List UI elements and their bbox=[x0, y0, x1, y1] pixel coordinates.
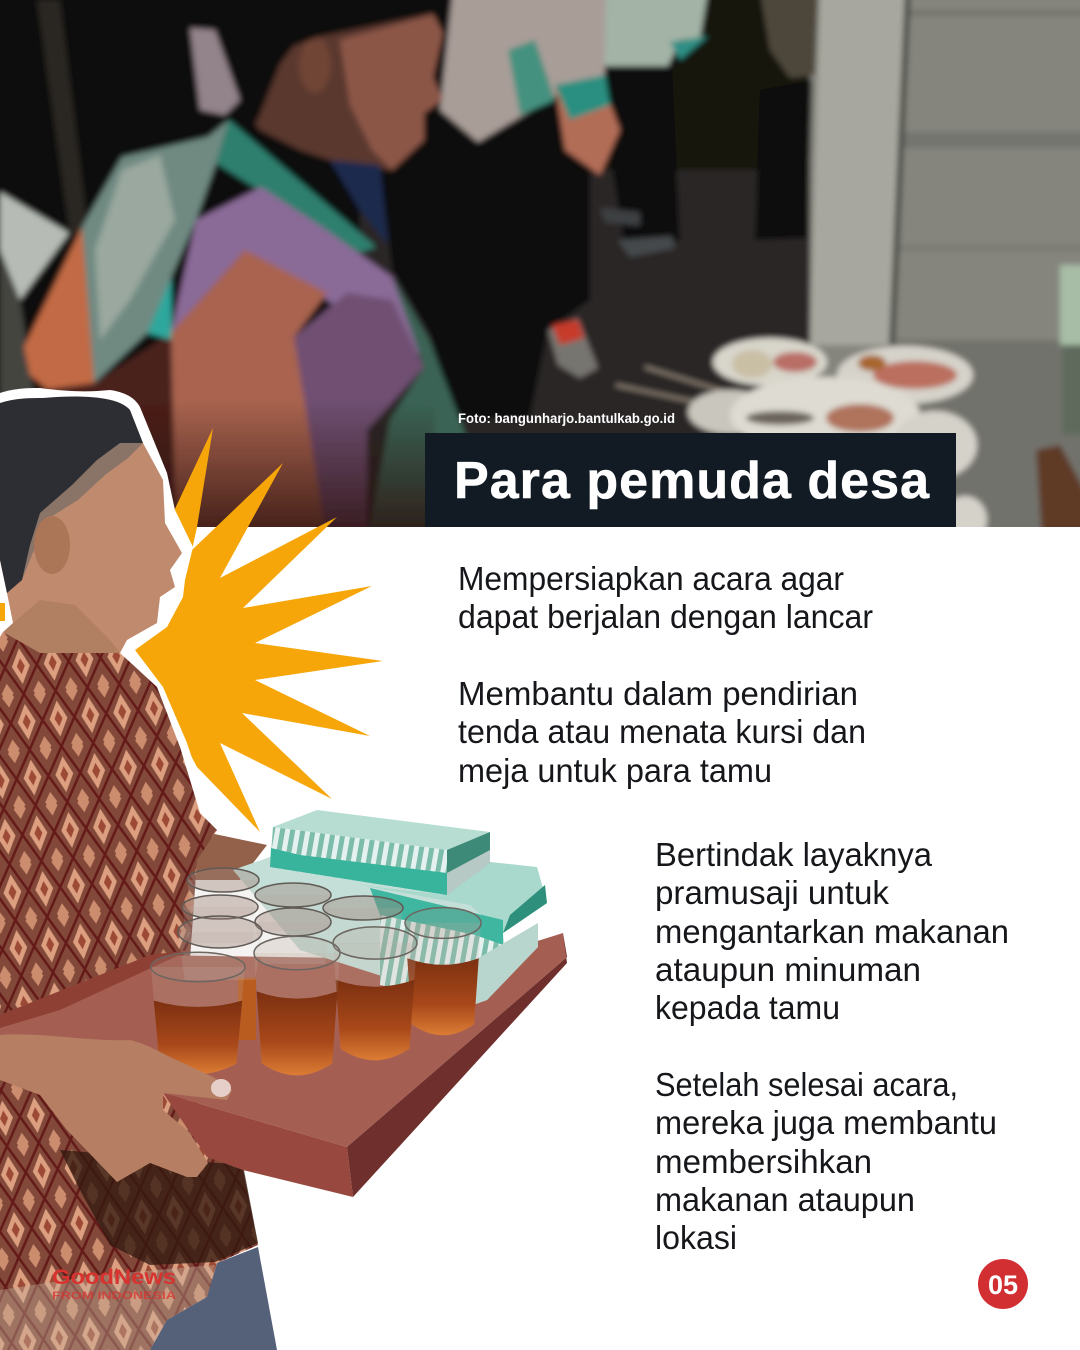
tray with glasses and boxes bbox=[0, 810, 567, 1197]
text block: setting up tents: tenda atau menata kursi dan bbox=[458, 713, 866, 750]
ear bbox=[34, 516, 70, 574]
photo credit: Foto: bangunharjo.bantulkab.go.id bbox=[458, 411, 675, 426]
tea behind front glasses bbox=[238, 978, 256, 1040]
hair fade bbox=[22, 440, 143, 580]
logo: GoodNews From Indonesia: FROM INDONESIA bbox=[52, 1290, 176, 1302]
text block: setting up tents: meja untuk para tamu bbox=[458, 752, 772, 789]
text block: serving guests: mengantarkan makanan bbox=[655, 913, 1009, 950]
page number badge bbox=[978, 1259, 1028, 1309]
text block: preparing the event bbox=[458, 560, 873, 635]
text block: setting up tents: Membantu dalam pendirian bbox=[458, 675, 858, 712]
neck shadow bbox=[3, 600, 120, 655]
hair bbox=[0, 396, 143, 593]
neck and face bbox=[0, 430, 182, 690]
text block: serving guests: kepada tamu bbox=[655, 989, 840, 1026]
title bar bbox=[425, 433, 956, 527]
text block: cleaning up: lokasi bbox=[655, 1219, 737, 1256]
text block: setting up tents bbox=[458, 675, 866, 789]
tray front side bbox=[163, 1093, 353, 1197]
text block: cleaning up: makanan ataupun bbox=[655, 1181, 915, 1218]
logo: GoodNews From Indonesia: GoodNews bbox=[52, 1266, 176, 1289]
text block: serving guests: Bertindak layaknya bbox=[655, 836, 933, 873]
lower hem bbox=[0, 1265, 215, 1350]
trousers bbox=[150, 1247, 277, 1350]
small orange chip bbox=[0, 603, 5, 621]
orange starburst bbox=[135, 428, 383, 832]
page number badge: 05 bbox=[988, 1270, 1018, 1300]
top box bbox=[273, 810, 490, 850]
tray right side bbox=[347, 933, 567, 1197]
text block: preparing the event: Mempersiapkan acara agar bbox=[458, 560, 844, 597]
tray rim left bbox=[0, 950, 190, 1028]
white outline bbox=[0, 388, 217, 850]
tray top bbox=[0, 933, 567, 1147]
text block: serving guests: pramusaji untuk bbox=[655, 874, 889, 911]
man holding tray bbox=[0, 388, 277, 1350]
batik shirt bbox=[0, 632, 258, 1350]
text block: cleaning up bbox=[655, 1066, 997, 1256]
text block: preparing the event: dapat berjalan dengan lancar bbox=[458, 598, 873, 635]
text block: cleaning up: membersihkan bbox=[655, 1143, 872, 1180]
text block: cleaning up: Setelah selesai acara, bbox=[655, 1066, 958, 1103]
lower boxes bbox=[233, 857, 547, 1005]
back glasses bbox=[187, 868, 259, 916]
logo: GoodNews From Indonesia bbox=[52, 1266, 176, 1302]
hand bbox=[0, 1034, 232, 1182]
title bar: Para pemuda desa bbox=[454, 452, 930, 510]
text block: cleaning up: mereka juga membantu bbox=[655, 1104, 997, 1141]
forearm bbox=[190, 832, 267, 880]
photo: village youths at the event bbox=[0, 0, 1080, 544]
text block: serving guests bbox=[655, 836, 1009, 1026]
shadow under hand bbox=[60, 1150, 258, 1265]
thumbnail bbox=[211, 1079, 231, 1097]
front glasses bbox=[405, 908, 481, 1035]
text block: serving guests: ataupun minuman bbox=[655, 951, 921, 988]
